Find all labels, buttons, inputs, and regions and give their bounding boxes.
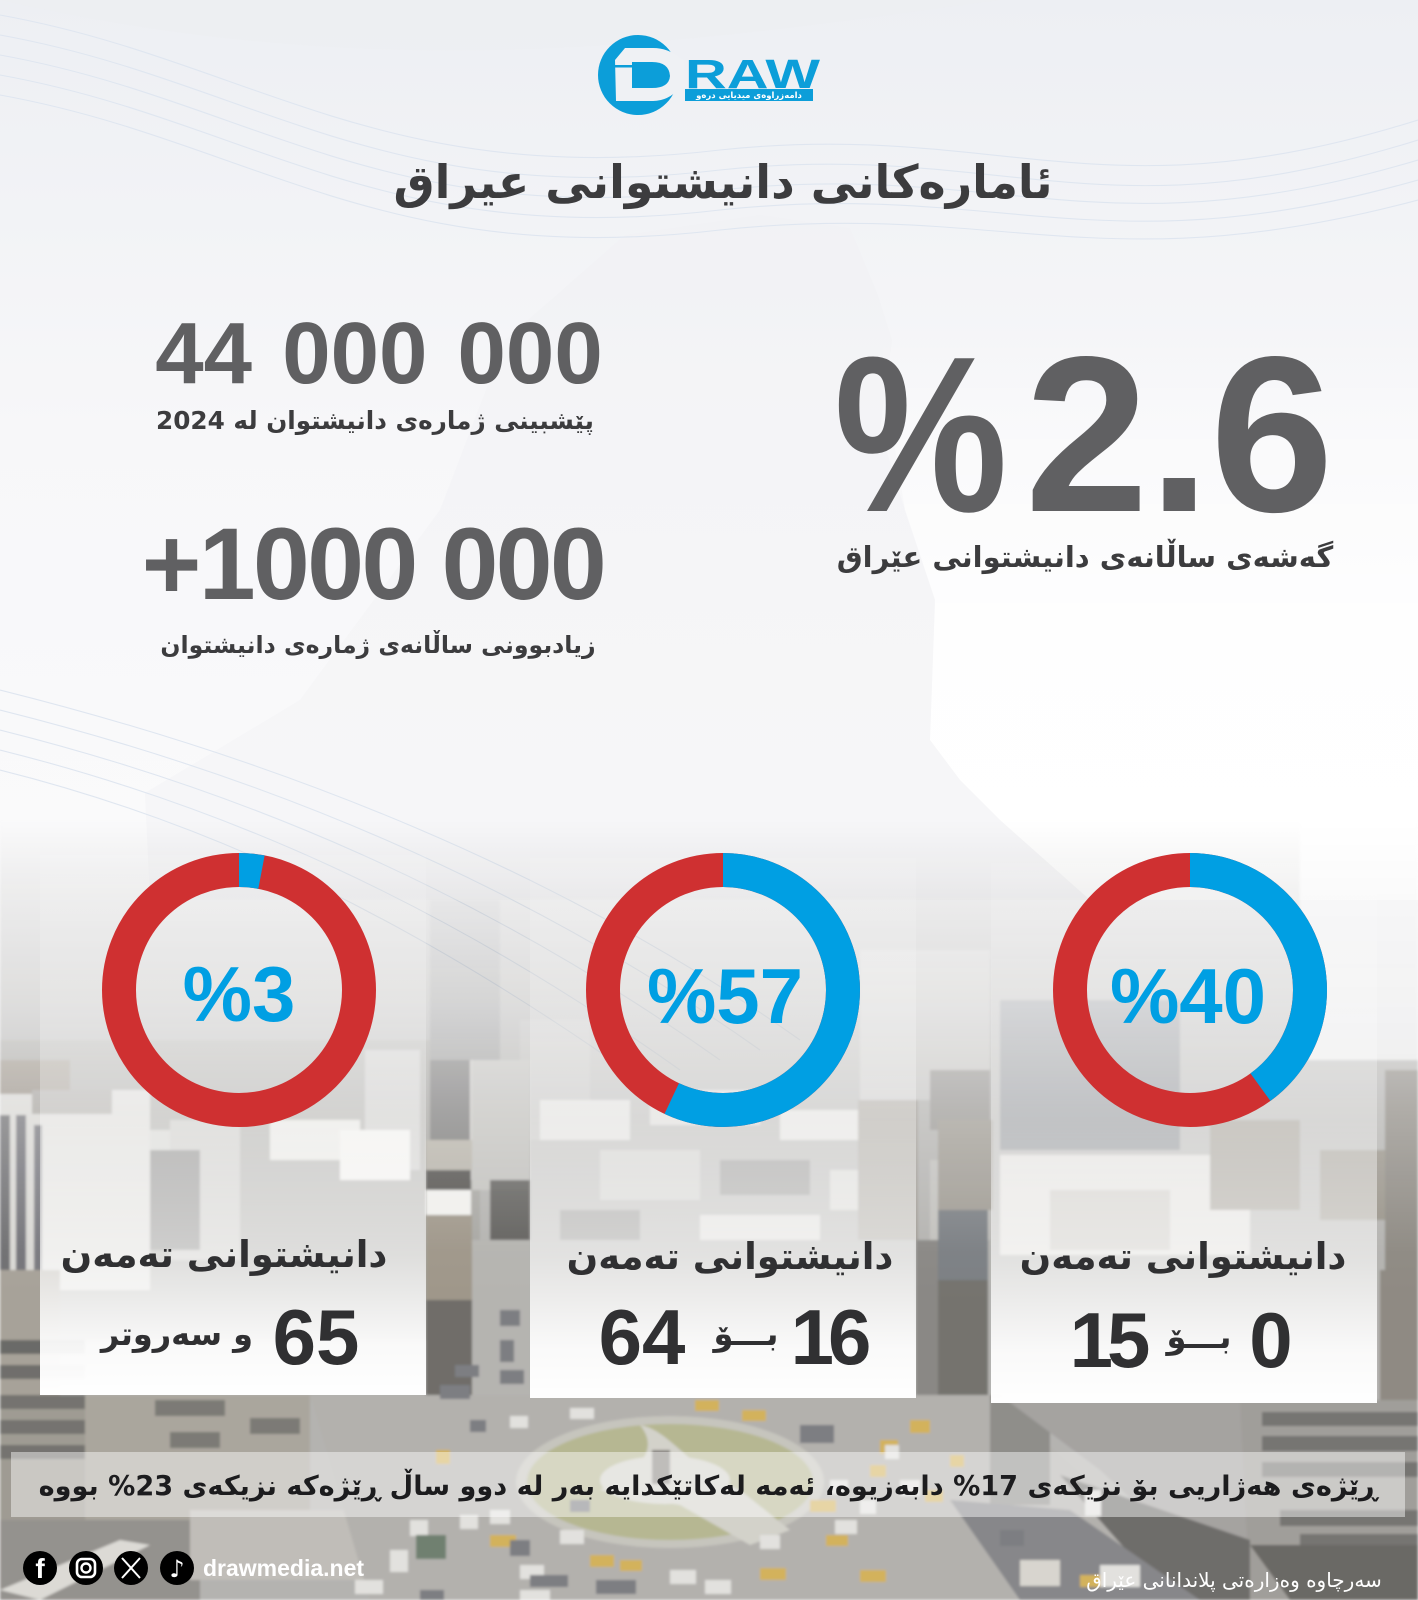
social icons	[23, 1551, 194, 1585]
stat label: forecast: پێشبینی ژمارەی دانیشتوان لە 2024	[156, 406, 594, 435]
logo: DRAW: دامەزراوەی میدیایی درەو	[695, 91, 803, 101]
source: سەرچاوە وەزارەتی پلاندانانی عێراق	[1086, 1568, 1382, 1592]
card value: 16: 16	[791, 1293, 865, 1381]
card label: and over: و سەروتر	[101, 1315, 253, 1353]
stat label: yearly increase: زیادبوونی ساڵانەی ژمارەی دانیشتوان	[160, 631, 596, 659]
logo: DRAW: RAW	[685, 51, 820, 97]
card label: to: بـــۆ	[714, 1315, 778, 1353]
right side buildings	[1000, 1155, 1250, 1255]
number 2.6: 2.6	[1025, 311, 1334, 559]
city photo blocks	[0, 820, 1418, 1600]
card title: 0-15: دانیشتوانی تەمەن	[1020, 1235, 1346, 1278]
stat: 44 000 000: 44 000 000	[155, 305, 603, 402]
donut: 40 percent	[1053, 853, 1327, 1127]
stat: +1000 000: +1000 000	[142, 507, 604, 621]
card title: 65+: دانیشتوانی تەمەن	[61, 1233, 387, 1276]
card title: 16-64: دانیشتوانی تەمەن	[567, 1235, 893, 1278]
card value: 0: 0	[1249, 1296, 1293, 1384]
title: ئامارەکانی دانیشتوانی عیراق	[394, 155, 1052, 209]
lower left buildings	[0, 1268, 60, 1396]
social icons: f	[35, 1553, 45, 1584]
donut value: 57: %57	[647, 952, 803, 1040]
right lower building	[1010, 1403, 1247, 1538]
logo: DRAW	[598, 35, 820, 115]
cars	[436, 1400, 1106, 1587]
card value: 15: 15	[1070, 1296, 1144, 1384]
percent sign: %	[834, 311, 1008, 559]
note text: ڕێژەی هەژاریی بۆ نزیکەی 17% دابەزیوە، ئەمە لەکاتێکدایە بەر لە دوو ساڵ ڕێژەکە نزیکەی 23% بووە	[39, 1471, 1377, 1502]
left tall building	[0, 1090, 150, 1290]
website: drawmedia.net	[203, 1555, 364, 1581]
stat label: annual growth: گەشەی ساڵانەی دانیشتوانی عێراق	[837, 540, 1333, 574]
donut value: 3: %3	[183, 950, 295, 1038]
donut value: 40: %40	[1110, 952, 1266, 1040]
card value: 65: 65	[273, 1293, 359, 1381]
donut: 57 percent	[586, 853, 860, 1127]
panel: card 65 and over	[40, 855, 426, 1395]
donut: 3 percent	[102, 853, 376, 1127]
panel: card 0 to 15	[991, 863, 1377, 1403]
panel: card 16 to 64	[530, 858, 916, 1398]
social icons: ♪	[169, 1555, 185, 1583]
stat: 2.6 percent	[834, 311, 1334, 559]
note strip	[11, 1452, 1405, 1517]
card label: to: بـــۆ	[1167, 1318, 1231, 1356]
road	[346, 1394, 989, 1579]
mid-distance roofs	[430, 976, 500, 1060]
card value: 64: 64	[599, 1293, 685, 1381]
roundabout	[516, 1416, 824, 1548]
